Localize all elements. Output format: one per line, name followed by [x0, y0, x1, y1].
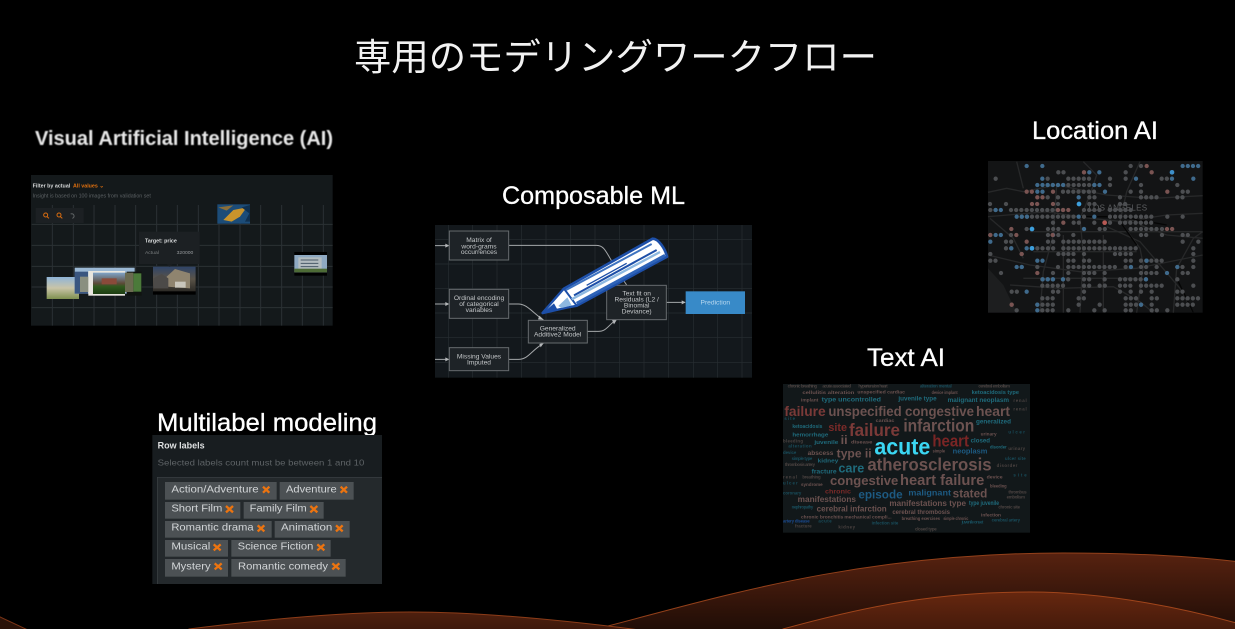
chip: Science Fiction [231, 540, 331, 557]
panel: text AI word cloud: fracture [795, 523, 812, 528]
chip: Mystery [165, 559, 228, 577]
panel: text AI word cloud: cerebral infarction [817, 504, 887, 513]
panel: text AI word cloud: urinary [981, 431, 997, 436]
chip: Short Film: Short Film [171, 504, 222, 515]
panel: text AI word cloud: embolism [1007, 494, 1025, 499]
chip: Musical: Musical [171, 542, 210, 553]
node: ordinal encoding: of categorical [459, 301, 499, 308]
node: prediction [686, 291, 745, 314]
panel: text AI word cloud: fracture [812, 469, 837, 475]
chip: Action/Adventure [165, 482, 277, 500]
node: missing values: Imputed [467, 360, 491, 367]
panel: composable ML flow diagram [435, 225, 752, 378]
chip: Musical [165, 540, 228, 557]
panel: location AI map [988, 161, 1203, 313]
tooltip: target price [139, 232, 200, 264]
background wave: large right [596, 553, 1235, 629]
panel: text AI word cloud: disorder [997, 463, 1018, 468]
filter text: All values ⌄ [73, 184, 104, 190]
chip: Action/Adventure: Action/Adventure [171, 485, 259, 496]
node: text fit on residuals: Binomial [624, 303, 650, 310]
road network [988, 162, 1203, 313]
panel: text AI word cloud: breathing exercises [902, 516, 940, 521]
node: prediction: Prediction [701, 300, 730, 307]
chip: Adventure [280, 482, 354, 500]
panel: text AI word cloud: simple chronic [943, 516, 969, 521]
tooltip: target price: Target: price [145, 239, 177, 245]
panel: text AI word cloud: acute [874, 433, 930, 459]
panel: text AI word cloud: congestive [830, 474, 898, 488]
panel: text AI word cloud: unspecified [828, 403, 902, 419]
panel: text AI word cloud: coronary [783, 491, 802, 496]
node: missing values [449, 348, 509, 371]
panel: text AI word cloud: type juvenile [969, 501, 1000, 507]
panel: text AI word cloud: simple type [792, 456, 813, 461]
panel: text AI word cloud: renal [1013, 398, 1027, 403]
panel: visual AI image scatter [31, 175, 333, 326]
image cluster: houses [47, 268, 142, 299]
panel: text AI word cloud: infection site [872, 521, 899, 526]
chip: Science Fiction: Science Fiction [238, 542, 314, 553]
background wave: corner [0, 616, 30, 629]
panel: text AI word cloud: cellulitis alteration [802, 390, 854, 396]
chip: Animation [275, 521, 350, 538]
panel: text AI word cloud: manifestations [798, 495, 857, 504]
filter text: Filter by actual [33, 184, 71, 190]
node: matrix of word-grams: word-grams [460, 243, 497, 250]
panel: text AI word cloud: failure [849, 420, 900, 440]
panel: text AI word cloud: chronic [825, 488, 851, 495]
panel: text AI word cloud: site [784, 416, 796, 421]
panel: text AI word cloud: generalized [976, 418, 1011, 425]
panel: text AI word cloud: site [1013, 473, 1027, 478]
panel: text AI word cloud: chronic breathing [788, 383, 817, 388]
node: missing values: Missing Values [457, 353, 502, 360]
panel: text AI word cloud: unspecified cardiac [857, 389, 905, 394]
chip: Mystery: Mystery [171, 562, 212, 573]
panel: text AI word cloud: hemorrhage [792, 433, 828, 439]
node: generalized additive model: Generalized [540, 325, 576, 332]
panel: text AI word cloud: ulcer [783, 481, 798, 486]
panel: text AI word cloud: renal [783, 475, 797, 480]
node: text fit on residuals: Deviance) [622, 309, 652, 316]
tooltip: target price: 320000 [177, 250, 194, 256]
heading: Multilabel modeling: Multilabel modeling [157, 409, 377, 437]
label selection box [157, 477, 382, 584]
heading: Composable ML: Composable ML [502, 182, 685, 210]
panel: text AI word cloud: nephropathy [792, 504, 814, 509]
panel: text AI word cloud: bleeding [783, 439, 803, 444]
panel: text AI word cloud: mechanical compli... [844, 515, 892, 521]
panel: text AI word cloud: ketoacidosis [792, 424, 822, 430]
panel: text AI word cloud: episode [858, 487, 903, 501]
background wave: small right [783, 592, 1235, 629]
panel: text AI word cloud: disorder [990, 444, 1007, 449]
node: text fit on residuals: Residuals (L2 / [614, 297, 659, 304]
title: 専用のモデリングワークフロー [354, 27, 877, 81]
node: matrix of word-grams: Matrix of [466, 237, 492, 244]
panel: text AI word cloud: chronic bronchitis [801, 515, 844, 521]
panel: text AI word cloud: closed type [915, 527, 937, 532]
panel: text AI word cloud: acute [818, 519, 832, 524]
panel: text AI word cloud: breathing [802, 475, 821, 480]
chip: Romantic comedy [231, 559, 346, 577]
panel: text AI word cloud: juvenile [813, 440, 838, 446]
panel: text AI word cloud: infarction [903, 416, 974, 436]
chip: Romantic drama: Romantic drama [171, 523, 254, 534]
heading: Visual Artificial Intelligence: Visual Artificial Intelligence (AI) [35, 128, 333, 150]
node: text fit on residuals [607, 285, 666, 320]
panel: text AI word cloud: ulcer [1008, 429, 1025, 434]
panel: text AI word cloud: bleeding [990, 483, 1007, 488]
panel: text AI word cloud: acute associated [822, 383, 851, 388]
panel: text AI word cloud: urinary [1008, 446, 1026, 451]
chip: Romantic comedy: Romantic comedy [238, 562, 329, 573]
panel: text AI word cloud: renal [1013, 407, 1027, 412]
image: blue map [217, 204, 250, 224]
panel: text AI word cloud: implant [801, 398, 819, 403]
panel: text AI word cloud: infection [981, 513, 1001, 519]
node: ordinal encoding: Ordinal encoding [454, 295, 504, 302]
panel: text AI word cloud: care [838, 462, 864, 476]
panel: text AI word cloud: ketoacidosis type [972, 390, 1019, 396]
chip: Family Film [244, 502, 324, 519]
node: ordinal encoding [449, 289, 509, 318]
node: generalized additive model [528, 320, 587, 343]
node: matrix of word-grams: occurrences [461, 249, 498, 256]
node: ordinal encoding: variables [466, 307, 493, 314]
panel: text AI word cloud: thrombosis artery [785, 462, 816, 467]
chip: Animation: Animation [281, 523, 333, 534]
panel: text AI word cloud: type ii [837, 446, 872, 460]
panel: text AI word cloud: heart [932, 432, 969, 451]
panel: text AI word cloud: chronic site [998, 504, 1021, 509]
panel: text AI word cloud: kidney [838, 524, 856, 529]
image: featured house [153, 264, 196, 295]
flow arrows [435, 244, 686, 361]
chip: Family Film: Family Film [250, 504, 307, 515]
heading: Location AI: Location AI [1032, 117, 1158, 145]
zoom toolbar [36, 208, 84, 223]
tooltip: target price: Actual [145, 250, 159, 256]
node: text fit on residuals: Text fit on [622, 290, 651, 297]
panel: text AI word cloud: cerebral artery [992, 518, 1021, 523]
icon: pencil [543, 239, 667, 313]
panel: text AI word cloud: artery disease [783, 519, 810, 524]
panel: text AI word cloud: cerebral thrombosis [892, 510, 951, 516]
panel: text AI word cloud: alteration [788, 443, 812, 448]
panel: text AI word cloud: juvenile type [897, 396, 937, 403]
price dots [990, 166, 1199, 310]
panel: text AI word cloud: thrombus [1008, 489, 1027, 494]
panel: text AI word cloud: kidney [818, 459, 839, 465]
panel: text AI word cloud: disease [851, 439, 873, 445]
panel: text AI word cloud: ulcer site [1005, 456, 1026, 461]
panel heading: Row labels [158, 441, 205, 451]
panel: text AI word cloud: malignant [908, 488, 951, 498]
panel: text AI word cloud [783, 383, 1030, 533]
panel: text AI word cloud: cerebral embolism [978, 383, 1010, 388]
panel: text AI word cloud: simple [933, 449, 946, 454]
panel: text AI word cloud: failure [784, 403, 826, 419]
panel: text AI word cloud: hypertension heart [858, 383, 888, 388]
panel: text AI word cloud: device [783, 450, 797, 455]
panel: text AI word cloud: closed [971, 438, 990, 444]
panel: text AI word cloud: malignant neoplasm [948, 397, 1009, 404]
panel: text AI word cloud: juvenile onset [961, 519, 984, 524]
heading: Text AI: Text AI [867, 344, 945, 372]
filter text: Insight is based on 100 images from validation set [33, 194, 151, 200]
panel: text AI word cloud: manifestations type [889, 499, 967, 508]
panel: text AI word cloud: type uncontrolled [822, 397, 881, 404]
chip: Romantic drama [165, 521, 272, 538]
panel: text AI word cloud: site [828, 422, 847, 434]
panel: text AI word cloud: cardiac [876, 418, 895, 423]
background wave: left [189, 612, 640, 629]
panel: text AI word cloud: device [987, 474, 1003, 479]
chip: Short Film [165, 502, 240, 519]
panel: text AI word cloud: ii [841, 433, 848, 447]
node: generalized additive model: Additive2 Model [534, 332, 582, 339]
panel: text AI word cloud: congestive [905, 403, 974, 419]
panel: text AI word cloud: device implant [932, 390, 958, 395]
panel: text AI word cloud: abscess [808, 451, 834, 457]
filter text [33, 184, 151, 200]
panel: multilabel row labels [152, 435, 382, 584]
panel: text AI word cloud: heart [976, 403, 1010, 419]
panel: text AI word cloud: atherosclerosis [867, 455, 992, 475]
image: building right [294, 252, 327, 276]
panel: text AI word cloud: syndrome [801, 482, 823, 488]
helper text: Selected labels count must be between 1 and 10 [158, 458, 365, 468]
panel: text AI word cloud: alteration mental [920, 383, 952, 388]
chip: Adventure: Adventure [286, 485, 337, 496]
panel: text AI word cloud: neoplasm [953, 446, 988, 455]
panel: text AI word cloud: stated [953, 486, 987, 500]
panel: text AI word cloud: heart failure [900, 473, 984, 489]
node: matrix of word-grams [449, 231, 509, 260]
panel: location AI map: LOS ANGELES [1088, 204, 1147, 213]
